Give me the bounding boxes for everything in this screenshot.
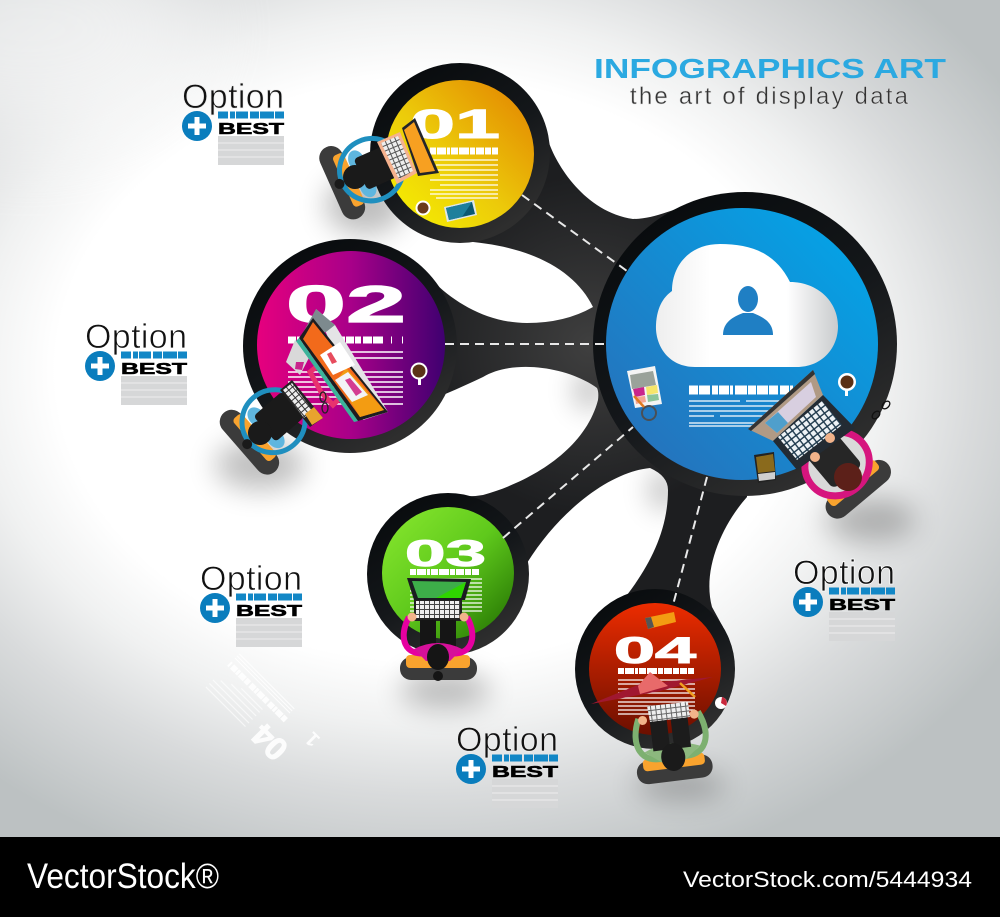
bubble 02	[243, 239, 457, 453]
icon: cloud with user	[656, 244, 838, 367]
icon: tablet	[754, 452, 776, 483]
bubble 01	[370, 63, 550, 243]
text block 01	[430, 151, 498, 198]
option block 2	[85, 318, 187, 405]
number 03: 03	[405, 533, 486, 574]
option block 5: Option	[456, 721, 558, 759]
icon: glasses	[871, 400, 891, 420]
option block 4: Option	[793, 554, 895, 592]
icon: coffee 01	[416, 200, 430, 216]
main title: INFOGRAPHICS ART	[594, 53, 946, 84]
option block 1: Option	[182, 78, 284, 116]
icon: pie chart	[715, 697, 727, 709]
bubble 04	[575, 589, 735, 749]
people shadows	[215, 175, 915, 799]
laptop 4	[591, 672, 713, 704]
option block 1	[182, 78, 284, 165]
faint reflected label 04: 04	[244, 717, 295, 768]
hub: main circle	[593, 192, 897, 496]
road network	[350, 140, 747, 669]
icon: coffee cup	[838, 373, 856, 396]
text block 03	[410, 572, 482, 611]
text block 04	[618, 671, 695, 714]
option block 5: BEST	[492, 764, 558, 781]
main title	[594, 53, 946, 110]
cables and glasses	[310, 368, 340, 413]
laptop 3	[407, 578, 471, 621]
option block 4: BEST	[829, 597, 895, 614]
icon: newspaper and magnifier	[627, 366, 662, 420]
brand name: VectorStock®	[27, 857, 219, 896]
option block 4	[793, 554, 895, 641]
number 01: 01	[410, 101, 500, 147]
icon: coffee 02	[410, 362, 428, 385]
option block 5	[456, 721, 558, 808]
icon: tablet 01	[444, 200, 477, 222]
option block 2: BEST	[121, 361, 187, 378]
bubble 03	[367, 493, 529, 655]
icon: newspaper 02	[286, 340, 312, 375]
road dashes	[445, 195, 707, 605]
faint reflected label 04: 1	[301, 727, 325, 751]
option block 3: BEST	[236, 603, 302, 620]
footer bar	[0, 837, 1000, 917]
main text block	[689, 390, 793, 426]
option block 1: BEST	[218, 121, 284, 138]
number 02: 02	[286, 276, 406, 334]
number 04: 04	[614, 630, 697, 671]
person 2 with monitor	[215, 309, 388, 479]
option block 3: Option	[200, 560, 302, 598]
text block 02	[288, 340, 403, 404]
faint reflected label 04	[197, 652, 325, 779]
image id: VectorStock.com/5444934	[683, 867, 972, 892]
subtitle: the art of display data	[630, 83, 909, 110]
person 1 with laptop	[315, 118, 439, 223]
icon: battery object	[645, 612, 676, 629]
option block 2: Option	[85, 318, 187, 356]
person main with laptop	[748, 370, 896, 524]
monitor	[296, 309, 388, 422]
person 3 with laptop	[400, 578, 477, 681]
keyboard 4	[647, 702, 690, 722]
person 4 with laptop	[591, 672, 714, 785]
main laptop	[748, 370, 855, 470]
laptop 1	[377, 118, 439, 184]
keyboard 2	[280, 380, 323, 427]
option block 3	[200, 560, 302, 647]
